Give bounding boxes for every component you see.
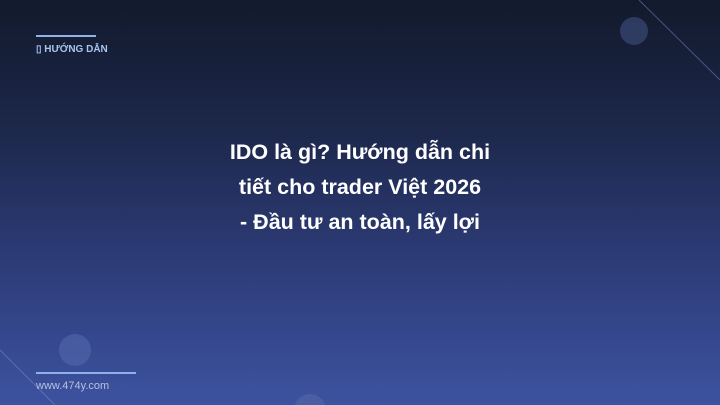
footer url: www.474y.com xyxy=(36,380,109,392)
title: tiết cho trader Việt 2026 xyxy=(239,175,481,199)
title: IDO là gì? Hướng dẫn chi xyxy=(230,140,490,164)
header label: ▯ HƯỚNG DẪN xyxy=(36,44,108,55)
title xyxy=(230,140,490,234)
circle decoration bottom left xyxy=(59,334,91,366)
circle decoration top right xyxy=(620,17,648,45)
title: - Đầu tư an toàn, lấy lợi xyxy=(240,210,480,234)
